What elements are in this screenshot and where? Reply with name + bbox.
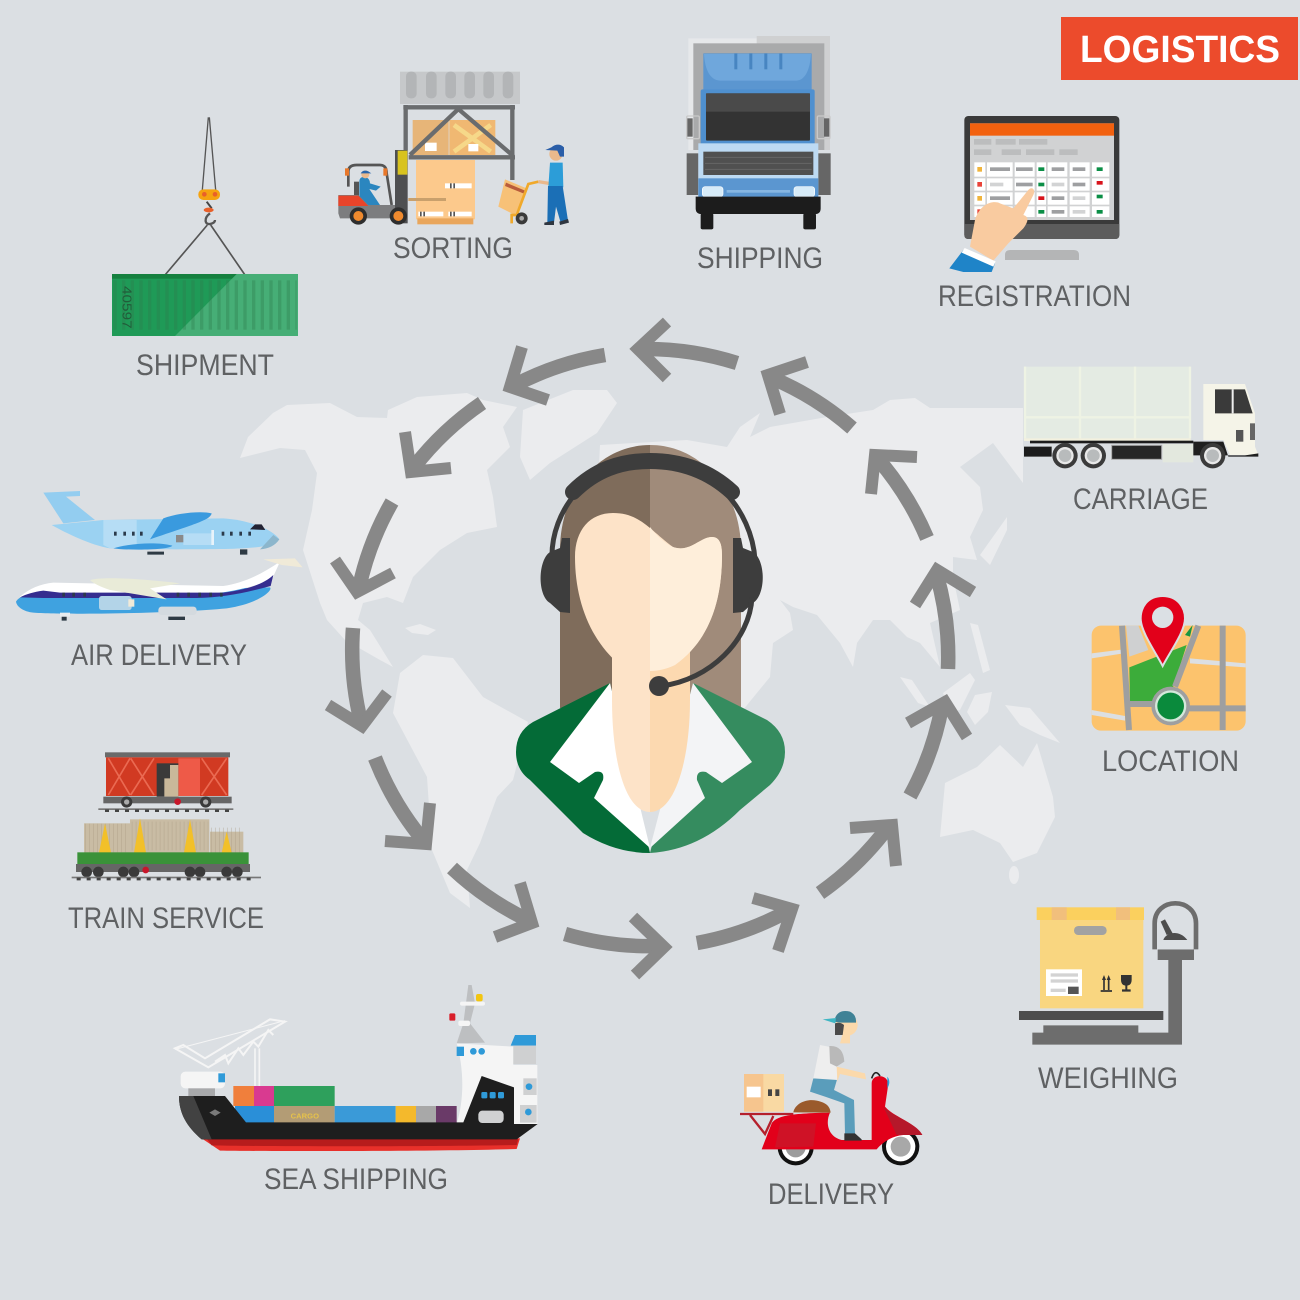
arrow 13: [375, 758, 430, 844]
icon: warehouse rack, forklift, worker: [338, 72, 569, 225]
label: TRAIN SERVICE: [68, 902, 264, 935]
arrow 1: bottom: [565, 917, 664, 975]
arrow 5: [915, 570, 973, 669]
icon: container on crane hook: 40597: [120, 286, 134, 329]
icon: container on crane hook: [112, 117, 298, 336]
arrow 8: [638, 322, 737, 378]
label: SORTING: [393, 232, 513, 265]
label: SEA SHIPPING: [264, 1163, 448, 1196]
label: CARRIAGE: [1073, 483, 1208, 516]
central agent figure with headset: [516, 445, 785, 853]
panel: delivery: [740, 1011, 922, 1211]
arrow 9: [510, 347, 605, 400]
label: SHIPPING: [697, 242, 823, 275]
arrow 4: [908, 702, 967, 796]
arrow ring: [328, 322, 973, 975]
arrow 14: [452, 868, 532, 937]
icon: monitor with touching hand: [949, 116, 1119, 272]
arrow 2: [697, 898, 792, 951]
arrow 6: [871, 455, 927, 538]
panel: location: [1092, 596, 1246, 778]
icon: map with pin: [1092, 596, 1246, 731]
icon: courier on red scooter: [740, 1011, 922, 1165]
label: REGISTRATION: [938, 280, 1131, 313]
label: DELIVERY: [768, 1178, 894, 1211]
badge: LOGISTICS: LOGISTICS: [1080, 29, 1280, 71]
arrow 7: [768, 362, 852, 428]
panel: shipment: [112, 117, 298, 382]
arrow 11: [335, 502, 393, 592]
icon: container ship: CARGO: [291, 1114, 320, 1121]
arrow 3: [820, 825, 896, 893]
world map: [240, 390, 1060, 908]
panel: sea shipping: [175, 985, 538, 1196]
panel: shipping: [687, 36, 831, 275]
panel: train service: [68, 752, 264, 935]
panel: sorting: [338, 72, 569, 265]
arrow 10: [405, 403, 482, 472]
panel: weighing: [1019, 903, 1196, 1095]
icon: container ship: [175, 985, 538, 1151]
label: SHIPMENT: [136, 349, 274, 382]
icon: box on platform scale: [1019, 903, 1196, 1045]
headset: [541, 458, 763, 696]
panel: registration: [938, 116, 1131, 313]
icon: freight train wagons: [72, 752, 261, 879]
arrow 12: [328, 628, 387, 726]
label: AIR DELIVERY: [71, 639, 247, 672]
icon: box truck front view: [687, 36, 831, 229]
panel: air delivery: [16, 491, 303, 672]
panel: carriage: [1024, 367, 1258, 516]
badge: LOGISTICS: [1061, 17, 1298, 80]
label: WEIGHING: [1038, 1062, 1178, 1095]
icon: two cargo planes: [16, 491, 303, 621]
label: LOCATION: [1102, 745, 1239, 778]
icon: semi truck side view: [1024, 367, 1258, 468]
